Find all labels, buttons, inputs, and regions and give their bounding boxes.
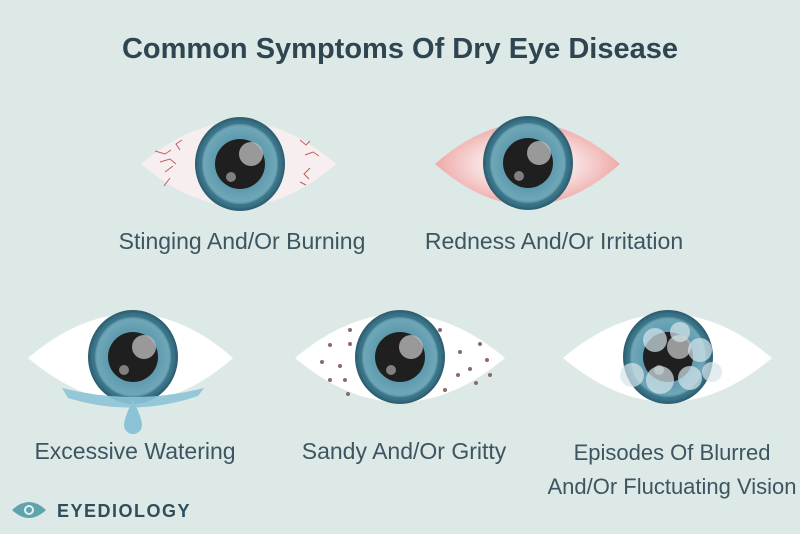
label: stinging: Stinging And/Or Burning	[119, 228, 365, 254]
eye: blurred	[563, 310, 772, 404]
eye: stinging	[141, 117, 336, 211]
title: Common Symptoms Of Dry Eye Disease	[122, 33, 678, 65]
label: redness: Redness And/Or Irritation	[425, 228, 683, 254]
label: blurred: And/Or Fluctuating Vision	[547, 474, 797, 499]
label: blurred: Episodes Of Blurred	[574, 440, 770, 465]
label: watering: Excessive Watering	[34, 438, 236, 464]
eye: watering	[28, 310, 233, 434]
eye: gritty	[295, 310, 505, 404]
eye: redness	[435, 116, 620, 210]
label: gritty: Sandy And/Or Gritty	[302, 438, 507, 464]
logo: EYEDIOLOGY	[57, 501, 191, 521]
